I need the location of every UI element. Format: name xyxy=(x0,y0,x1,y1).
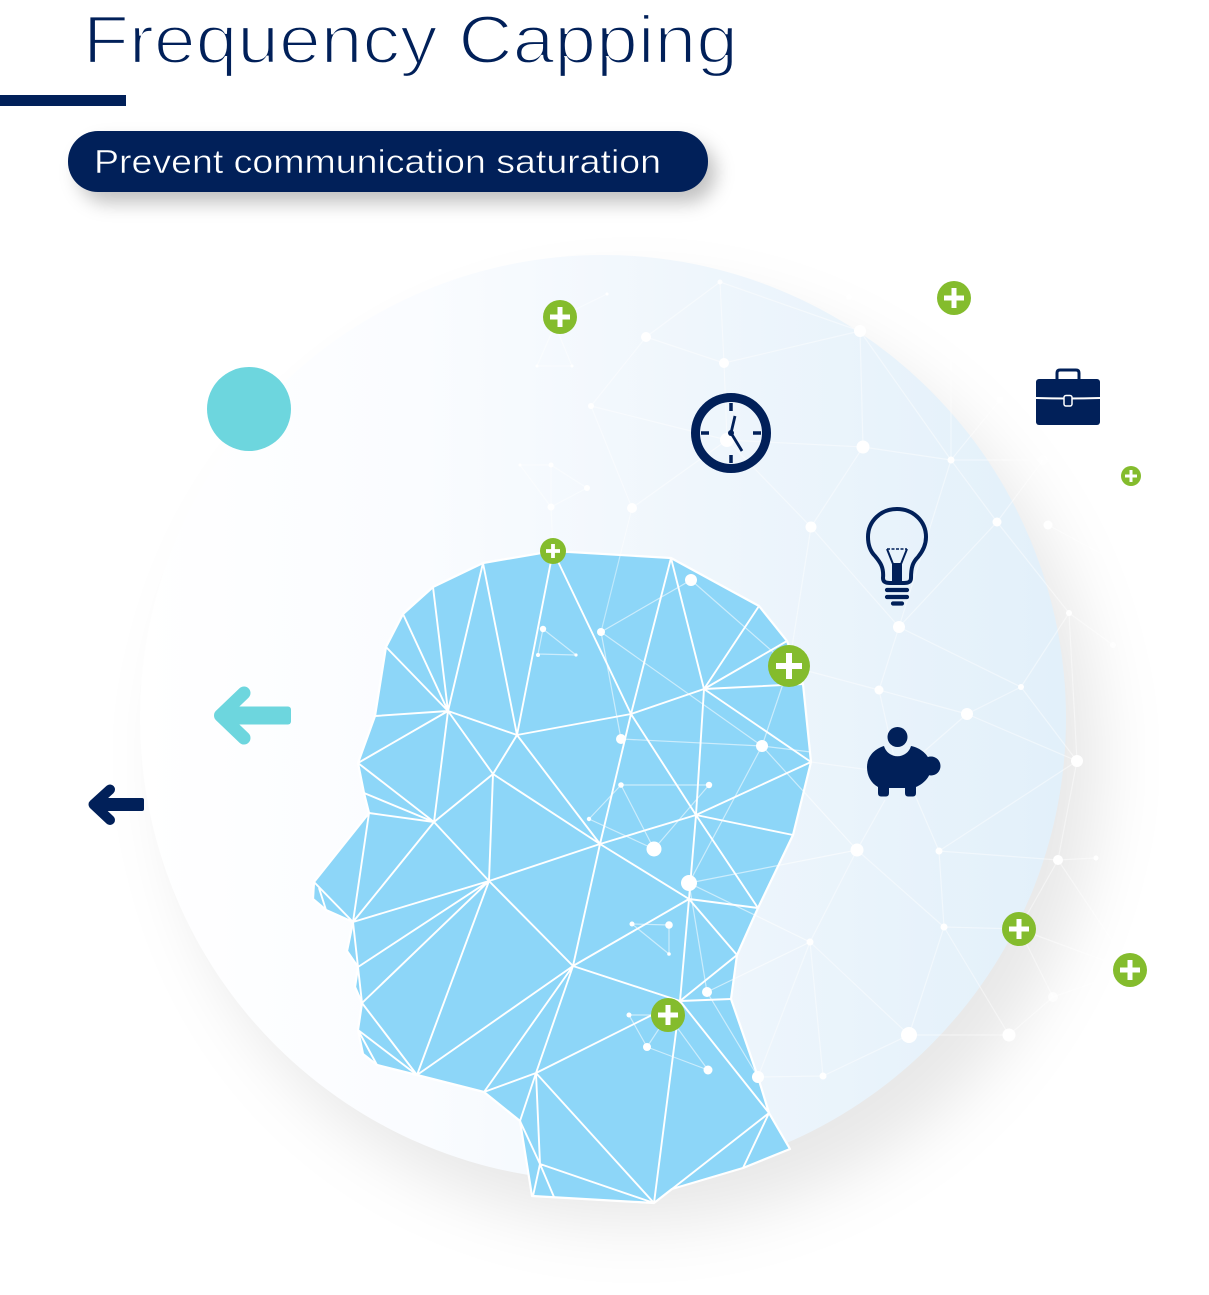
network nodes xyxy=(518,280,1116,1083)
subtitle pill: Prevent communication saturation xyxy=(94,143,661,180)
title accent bar xyxy=(0,95,126,106)
head polygon xyxy=(313,551,811,1203)
teal circle xyxy=(207,367,291,451)
icon: light bulb xyxy=(868,509,926,604)
icon: piggy bank xyxy=(867,727,940,796)
title: Frequency Capping xyxy=(83,2,738,78)
icon: clock xyxy=(696,398,766,468)
background disc xyxy=(140,255,1066,1181)
icon: navy arrow xyxy=(94,790,144,820)
disc shadow xyxy=(172,296,1100,1224)
subtitle pill xyxy=(68,131,716,203)
icon: briefcase xyxy=(1036,370,1100,425)
icon: teal arrow xyxy=(220,693,291,738)
network lines xyxy=(520,282,1130,1077)
icon: plus badges xyxy=(540,281,1147,1032)
